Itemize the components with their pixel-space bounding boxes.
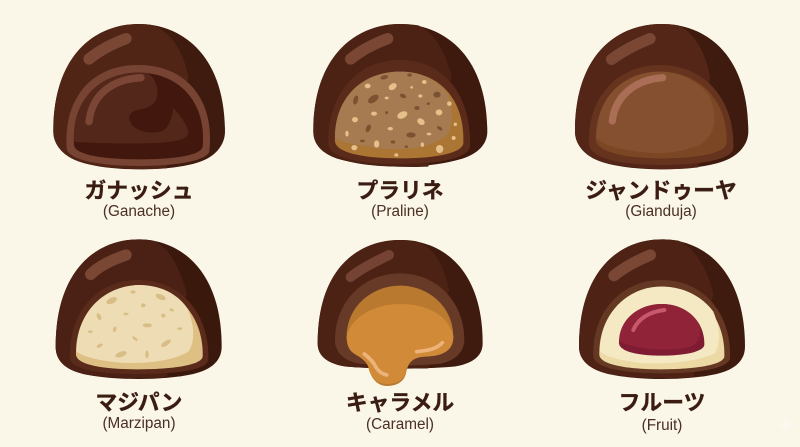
icon: caramel chocolate [318,240,483,386]
title: ジャンドゥーヤ: ジャンドゥーヤ [585,178,737,203]
subtitle: Praline: (Praline) [371,203,429,220]
subtitle: Fruit: (Fruit) [642,417,682,434]
icon: ganache chocolate [53,24,225,169]
title: プラリネ: プラリネ [356,178,444,203]
panel: fruit [579,239,745,434]
icon: praline chocolate [313,24,487,167]
fruit jelly [619,304,704,356]
panel: caramel [318,240,483,433]
icon: faint sparkle [777,416,795,434]
subtitle: Marzipan: (Marzipan) [102,415,176,432]
panel: praline [313,24,487,220]
subtitle: Gianduja: (Gianduja) [625,203,697,220]
title: ガナッシュ: ガナッシュ [84,178,194,203]
praline nut specks [345,80,457,157]
caramel drip [347,286,453,386]
title: フルーツ: フルーツ [619,390,705,415]
icon: marzipan chocolate [56,239,222,379]
panel: ganache [53,24,225,220]
subtitle: Caramel: (Caramel) [366,416,434,433]
icon: gianduja chocolate [575,24,748,169]
title: マジパン: マジパン [96,390,182,415]
marzipan almond specks [88,290,182,359]
subtitle: Ganache: (Ganache) [103,203,175,220]
title: キャラメル: キャラメル [346,390,454,415]
icon: fruit chocolate [579,239,745,379]
panel: marzipan [56,239,222,432]
panel: gianduja [575,24,748,220]
